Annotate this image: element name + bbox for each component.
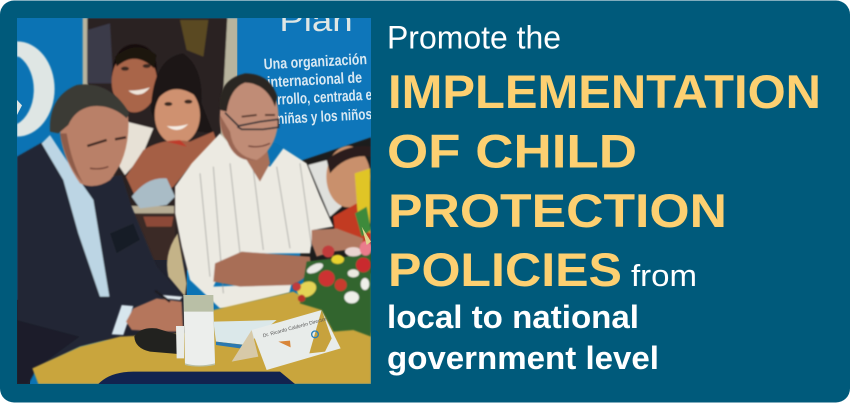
glasses case [134,328,178,354]
right Plan banner [237,18,371,126]
chair [167,233,187,297]
heading line: POLICIES: POLICIES [388,243,622,296]
text: from: from [631,258,697,293]
forearm [213,252,312,287]
girl [151,53,213,133]
name on card: Dr. Ricardo Calderón Director [262,316,327,339]
head [60,103,128,186]
navy table skirt [98,372,295,384]
left man [17,83,154,383]
banner text: niñas y los niños [277,106,372,128]
jacket [17,142,154,366]
heading: Promote the: Promote the [387,20,561,56]
name tent card [232,310,341,370]
small child poster [300,137,371,273]
boy [112,44,157,77]
banner text: internacional de [267,69,362,91]
paper [213,320,277,345]
left man's cuff and hand [112,291,183,335]
water glass [176,295,215,367]
banner text: rrollo, centrada e [277,87,372,109]
neck and head [246,150,271,182]
table cloth [32,292,371,384]
logo ring on left banner [17,41,55,137]
text: government level: government level [387,340,659,376]
right man [175,73,363,308]
dark backdrop behind the seated men [17,260,187,384]
text: local to national: local to national [387,299,639,335]
heading line: PROTECTION: PROTECTION [388,184,727,237]
banner text: Una organización [263,51,367,73]
banner wordmark: Plan [279,4,353,38]
shirt [42,135,109,297]
heading line: OF CHILD: OF CHILD [387,124,637,178]
banner text [263,51,372,128]
glasses [225,113,278,129]
photo: two men at a signing table in front of Plan banners [17,4,372,384]
shirt [175,133,333,308]
central poster of children [83,18,238,270]
flower arrangement [292,241,372,337]
heading line: IMPLEMENTATION: IMPLEMENTATION [388,65,821,118]
